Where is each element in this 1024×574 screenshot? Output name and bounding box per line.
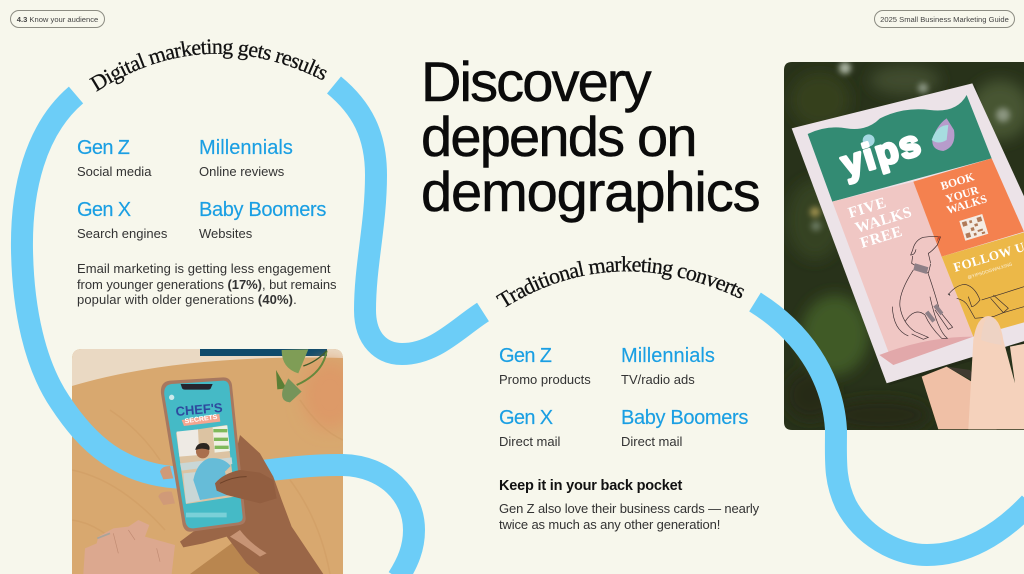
- guide tag: [874, 10, 1015, 28]
- curved heading: traditional: Traditional marketing converts: [496, 256, 744, 308]
- Millennials traditional: Millennials: [621, 345, 715, 367]
- section tag: 4.3 Know your audience: [17, 15, 98, 24]
- Millennials traditional: [621, 345, 715, 387]
- panel: digital: [77, 137, 336, 307]
- photo: wooden table: [72, 349, 343, 574]
- phone in hand: CHEF'S: [175, 400, 224, 419]
- email note: Email marketing is getting less engagement: [77, 261, 331, 276]
- panel: traditional: [499, 345, 760, 532]
- Gen Z digital: [77, 137, 152, 179]
- postcard text: WALKS: [945, 193, 989, 217]
- Gen X digital: Gen X: [77, 199, 130, 221]
- Millennials digital: Online reviews: [199, 164, 284, 179]
- back pocket note: [499, 501, 760, 532]
- Millennials traditional: TV/radio ads: [621, 372, 695, 387]
- Millennials digital: Millennials: [199, 137, 293, 159]
- title: [421, 50, 760, 223]
- Boomers traditional: Baby Boomers: [621, 407, 748, 429]
- title: demographics: [421, 160, 760, 223]
- guide tag: 2025 Small Business Marketing Guide: [880, 15, 1009, 24]
- title: Discovery: [421, 50, 650, 113]
- postcard text: @YIPSDOGWALKING: [967, 261, 1013, 280]
- Boomers digital: [199, 199, 326, 241]
- email note: popular with older generations (40%).: [77, 292, 297, 307]
- title: depends on: [421, 105, 696, 168]
- Gen Z digital: Social media: [77, 164, 151, 179]
- postcard text: FIVE: [846, 194, 889, 222]
- postcard text: yips: [836, 121, 927, 185]
- email note: [77, 261, 336, 307]
- Gen X traditional: [499, 407, 560, 449]
- Gen Z traditional: Gen Z: [499, 345, 551, 367]
- Gen X digital: Search engines: [77, 226, 167, 241]
- Boomers digital: Websites: [199, 226, 252, 241]
- section tag: [10, 10, 105, 28]
- Gen Z traditional: Promo products: [499, 372, 591, 387]
- Boomers digital: Baby Boomers: [199, 199, 326, 221]
- Millennials digital: [199, 137, 293, 179]
- Gen Z traditional: [499, 345, 591, 387]
- postcard text: YOUR: [944, 184, 981, 206]
- back pocket note: twice as much as any other generation!: [499, 516, 720, 532]
- Gen Z digital: Gen Z: [77, 137, 129, 159]
- photo: postcard: [784, 62, 1024, 430]
- Gen X traditional: Direct mail: [499, 434, 560, 449]
- Boomers traditional: Direct mail: [621, 434, 682, 449]
- Gen X traditional: Gen X: [499, 407, 552, 429]
- Boomers traditional: [621, 407, 748, 449]
- email note: from younger generations (17%), but remains: [77, 276, 336, 292]
- back pocket note: Gen Z also love their business cards — nearly: [499, 501, 759, 516]
- back pocket heading: Keep it in your back pocket: [499, 478, 682, 494]
- postcard text: BOOK: [939, 171, 976, 193]
- phone in hand: SECRETS: [184, 414, 218, 425]
- Gen X digital: [77, 199, 167, 241]
- postcard text: WALKS: [853, 203, 914, 237]
- curved heading: digital: Digital marketing gets results: [89, 39, 327, 92]
- postcard text: FREE: [858, 223, 905, 252]
